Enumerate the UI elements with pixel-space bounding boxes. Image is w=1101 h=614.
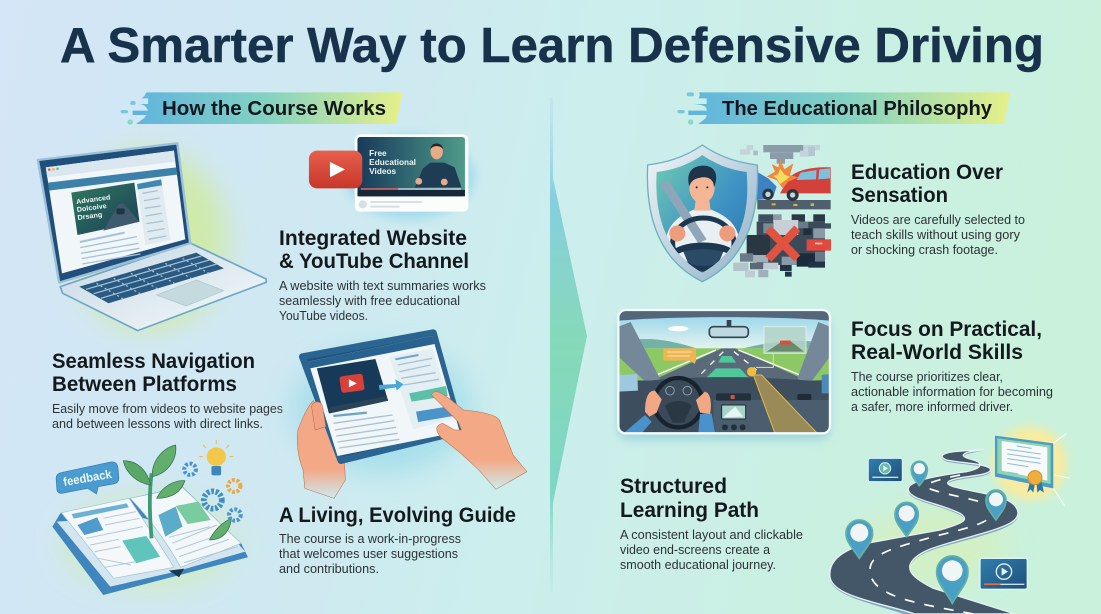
icon: laptop showing course website <box>38 143 266 331</box>
icon: winding road with pins, videos and certificate <box>830 427 1070 614</box>
panel: how the course works <box>38 92 527 595</box>
body text: video end-screens create a <box>620 542 771 557</box>
icon: laptop showing course website: Advanced <box>76 193 111 206</box>
heading: Integrated Website <box>279 227 467 250</box>
banner heading: The Educational Philosophy <box>677 92 1010 125</box>
heading: Sensation <box>851 184 948 207</box>
heading <box>851 318 1042 364</box>
feedback speech bubble: feedback <box>62 467 113 489</box>
heading: A Living, Evolving Guide <box>279 504 516 527</box>
heading <box>52 350 255 396</box>
icon: video thumbnail upper <box>868 458 902 482</box>
icon: laptop showing course website: Dolcoive <box>76 202 107 214</box>
heading: Structured <box>620 475 727 498</box>
icon: certificate with medal <box>995 433 1070 506</box>
icon: driver's view dashboard with heads-up guidance <box>618 310 830 440</box>
heading: Real-World Skills <box>851 341 1023 364</box>
rear-view mirror <box>709 320 748 337</box>
body text <box>52 401 283 431</box>
heading: & YouTube Channel <box>279 250 469 273</box>
block: education over sensation <box>647 145 1025 282</box>
body text: a safer, more informed driver. <box>851 399 1013 414</box>
body text: A website with text summaries works <box>279 278 486 293</box>
central chevron divider <box>550 97 587 592</box>
body text: Easily move from videos to website pages <box>52 401 283 416</box>
icon: protective shield with driver <box>647 145 758 282</box>
heading: Learning Path <box>620 499 759 522</box>
icon: video card with play button: Educational <box>369 158 416 167</box>
body text <box>279 278 486 323</box>
banner heading: The Educational Philosophy: The Educational Philosophy <box>722 98 993 120</box>
body text: Videos are carefully selected to <box>851 212 1025 227</box>
icon: video card with play button: Free <box>369 149 387 158</box>
title: A Smarter Way to Learn Defensive Driving <box>60 19 1044 73</box>
icon: video thumbnail lower <box>980 558 1027 589</box>
icon: crash scene with pixelated footage <box>647 145 831 282</box>
block: seamless navigation <box>52 333 527 498</box>
body text: actionable information for becoming <box>851 384 1053 399</box>
icon: open book with plant, gears and feedback bubble <box>52 440 248 595</box>
body text: A consistent layout and clickable <box>620 527 803 542</box>
body text <box>279 531 461 576</box>
heading <box>279 227 469 273</box>
heading <box>620 475 759 522</box>
block: integrated website and YouTube channel <box>279 133 486 323</box>
feedback speech bubble <box>56 462 119 494</box>
pixelated crash footage with red cross <box>733 214 831 277</box>
body text: teach skills without using gory <box>851 227 1020 242</box>
heading: Education Over <box>851 161 1003 184</box>
body text: smooth educational journey. <box>620 557 776 572</box>
heading: Focus on Practical, <box>851 318 1042 341</box>
body text: and between lessons with direct links. <box>52 416 263 431</box>
body text: YouTube videos. <box>279 308 368 323</box>
heading: Between Platforms <box>52 373 237 396</box>
body text <box>851 369 1053 414</box>
icon: video card with play button <box>309 133 475 220</box>
body text: seamlessly with free educational <box>279 293 460 308</box>
body text: The course prioritizes clear, <box>851 369 1003 384</box>
heading <box>851 161 1003 207</box>
panel: the educational philosophy <box>618 92 1070 614</box>
banner heading: How the Course Works: How the Course Works <box>162 98 386 120</box>
body text: and contributions. <box>279 561 379 576</box>
block: practical real-world skills <box>618 310 1053 440</box>
body text <box>620 527 803 572</box>
block: structured learning path <box>620 427 1070 614</box>
body text: The course is a work-in-progress <box>279 531 461 546</box>
body text: or shocking crash footage. <box>851 242 998 257</box>
body text: that welcomes user suggestions <box>279 546 458 561</box>
icon: map pins <box>846 461 1006 603</box>
icon: tablet held in hands <box>293 333 527 498</box>
icon: video card with play button: Videos <box>369 167 397 176</box>
block: living, evolving guide <box>52 440 516 595</box>
body text <box>851 212 1025 257</box>
heading: Seamless Navigation <box>52 350 255 373</box>
banner heading: How the Course Works <box>121 92 402 125</box>
icon: laptop showing course website: Drsang <box>77 211 103 222</box>
